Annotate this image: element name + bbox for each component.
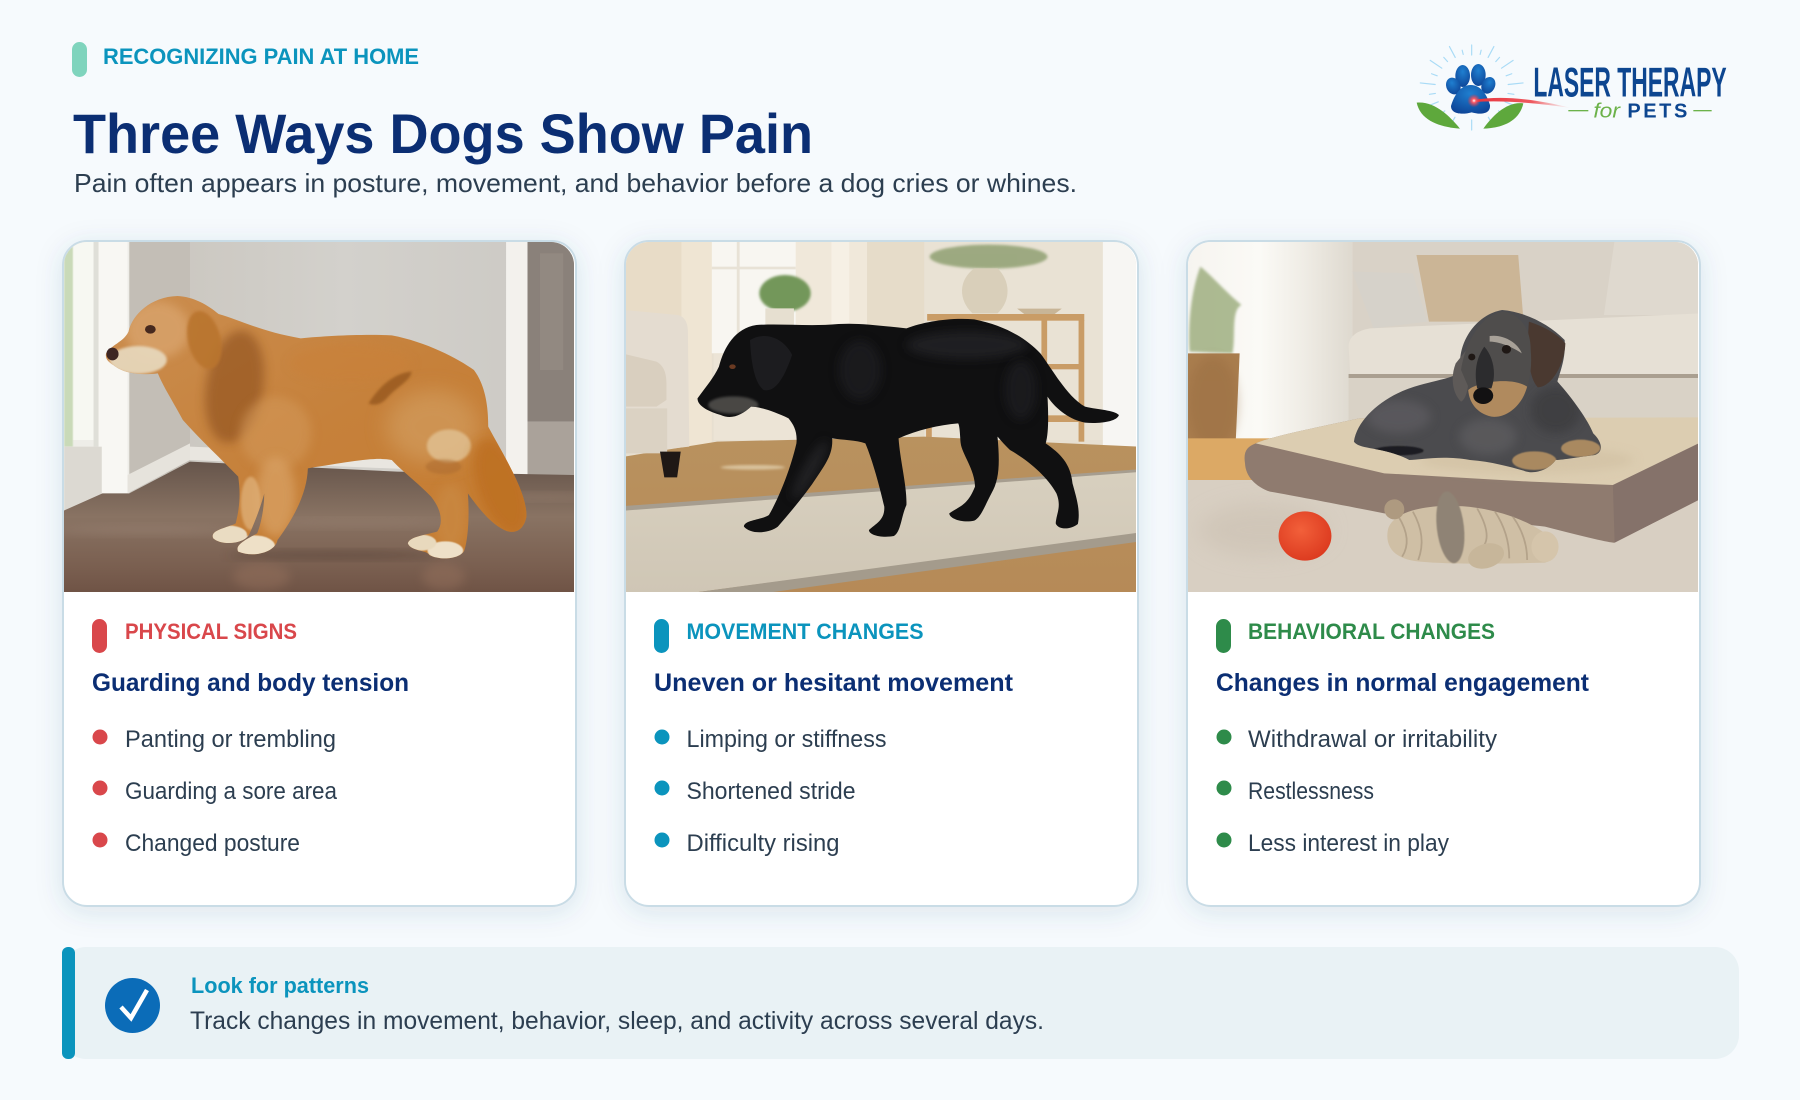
callout background [62,947,1739,1059]
bullet list: Limping or stiffness [686,726,886,753]
panel: physical signs [54,240,597,906]
callout title: Look for patterns [191,973,369,998]
logo tagline [1568,100,1712,122]
bullet list: Less interest in play [1248,830,1449,857]
armchair [624,310,689,477]
category header [1216,619,1495,653]
logo: Laser Therapy for Pets [1417,45,1727,130]
potted plant in basket [1188,267,1241,456]
bullet list: Panting or trembling [125,726,336,753]
sofa [1349,240,1702,423]
title: Three Ways Dogs Show Pain [73,102,813,165]
header [72,42,1077,198]
bullet list: Difficulty rising [686,830,840,857]
rug [1184,480,1702,593]
category header: MOVEMENT CHANGES [686,619,924,644]
logo leaves [1417,103,1523,129]
category header [92,619,297,653]
card heading: Guarding and body tension [92,669,409,697]
bullet list: Changed posture [125,830,300,857]
category header [654,619,924,653]
icon: check mark [105,978,160,1033]
bullet list [654,726,886,857]
bullet list: Shortened stride [686,778,856,805]
logo tagline: for [1593,100,1622,122]
bullet list [92,726,338,857]
logo sun rays [1420,45,1523,130]
eyebrow label: RECOGNIZING PAIN AT HOME [103,44,419,69]
card heading: Changes in normal engagement [1216,669,1590,697]
card heading: Uneven or hesitant movement [654,669,1014,697]
wood floor [624,437,1139,593]
rug [624,470,1139,593]
stuffed toy [1384,500,1558,569]
callout accent bar [62,947,75,1059]
vase and foliage [930,245,1062,315]
bullet list: Guarding a sore area [125,778,338,805]
logo paw print [1443,64,1498,114]
card background [625,241,1138,906]
category header: PHYSICAL SIGNS [125,619,297,644]
card background [1187,241,1700,906]
panel: movement changes [624,240,1139,906]
console table [926,314,1084,442]
panel: behavioral changes [1184,240,1702,906]
bullet list [1216,726,1497,857]
wirehaired dachshund [1354,310,1601,472]
bullet list: Withdrawal or irritability [1248,726,1497,753]
bullet list: Restlessness [1248,778,1374,805]
cushion bed [1245,417,1699,543]
photo: golden retriever standing stiffly [54,240,597,593]
callout: look for patterns [62,947,1739,1059]
callout text: Track changes in movement, behavior, sleep, and activity across several days. [190,1007,1044,1035]
black labrador [697,319,1119,537]
photo: wirehaired dachshund resting on a bed beside toys [1184,240,1702,593]
photo: black labrador walking hesitantly [624,240,1139,593]
card background [63,241,576,906]
category header: BEHAVIORAL CHANGES [1248,619,1495,644]
eyebrow accent pill [72,42,87,77]
subtitle: Pain often appears in posture, movement, and behavior before a dog cries or whines. [74,168,1077,198]
golden retriever [106,296,539,560]
logo tagline: PETS [1627,100,1687,122]
red rubber ball [1279,511,1331,561]
logo laser beam [1467,94,1572,108]
window plant [759,275,811,325]
